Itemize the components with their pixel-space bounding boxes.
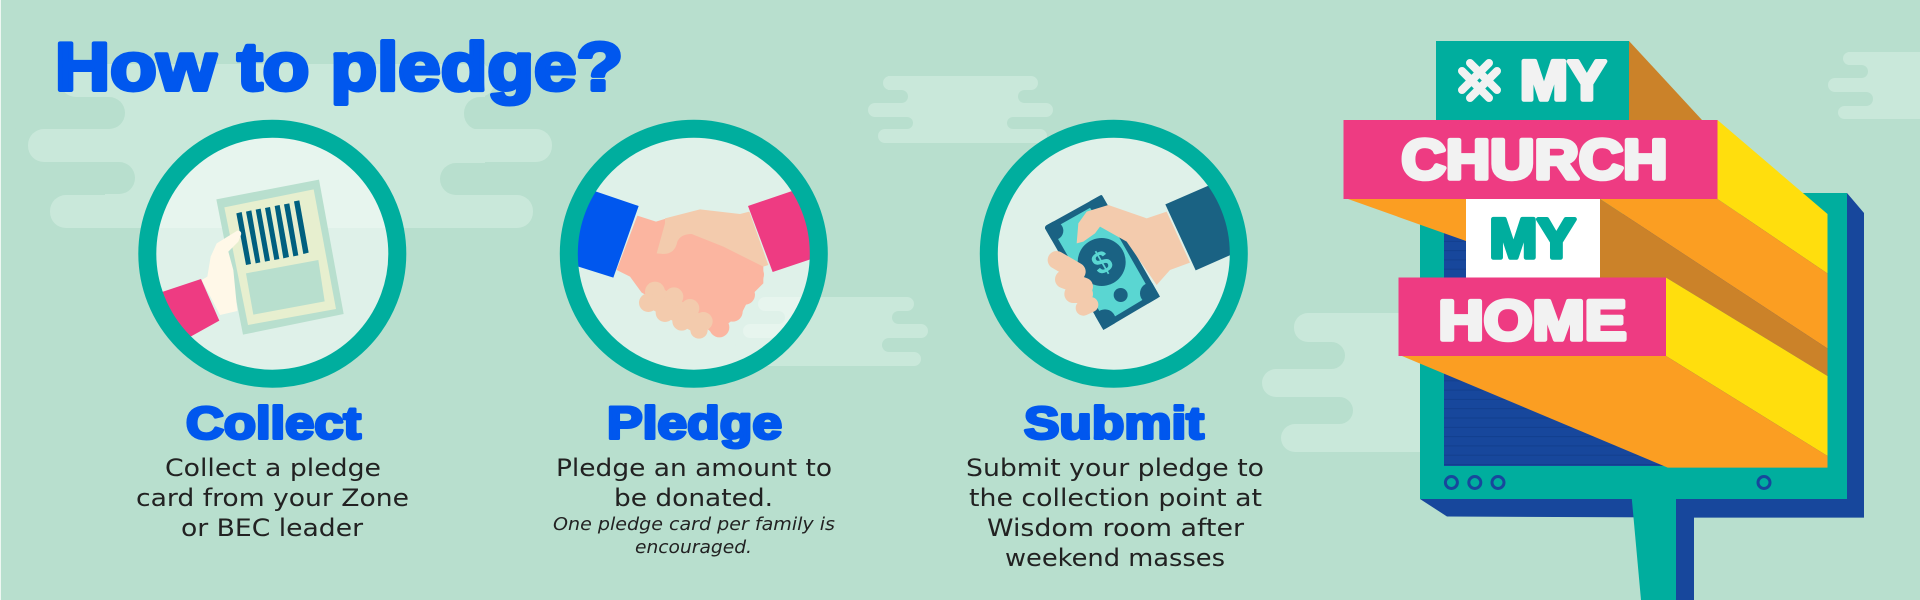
- indicator lights: [1445, 476, 1770, 488]
- text: pledge description: encouraged.: [635, 538, 752, 558]
- sign block: white MY: MY: [1490, 207, 1576, 270]
- text: pledge description: One pledge card per family is: [553, 515, 835, 535]
- icon: hand holding pledge card: [150, 180, 344, 344]
- background clouds: [0, 52, 1920, 452]
- text: submit description: Wisdom room after: [987, 514, 1244, 542]
- heading: Collect: Collect: [186, 398, 361, 448]
- sign block: teal MY: [1436, 41, 1629, 120]
- sign block: CHURCH: CHURCH: [1402, 128, 1668, 191]
- sign block: HOME: HOME: [1438, 289, 1626, 352]
- panel: pledge: [553, 129, 835, 558]
- logo: cross hatch mark: [1462, 63, 1497, 98]
- sign block: teal MY: MY: [1520, 49, 1606, 112]
- icon: handshake: [565, 187, 823, 339]
- sign block: HOME: [1398, 278, 1666, 356]
- 3D sign block sides: [1348, 41, 1828, 468]
- billboard screen: [1444, 214, 1828, 466]
- heading: Pledge: Pledge: [607, 398, 782, 448]
- circle background submit: [989, 129, 1239, 379]
- text: pledge description: Pledge an amount to: [556, 454, 832, 482]
- circle background collect: [147, 129, 397, 379]
- text: collect description: card from your Zone: [136, 484, 409, 512]
- text: submit description: [966, 454, 1264, 572]
- text: collect description: Collect a pledge: [165, 454, 381, 482]
- text: submit description: the collection point at: [969, 484, 1262, 512]
- billboard frame and pole: [1420, 193, 1847, 600]
- text: collect description: [136, 454, 409, 542]
- sign block: white MY: [1466, 199, 1600, 278]
- text: pledge description: be donated.: [614, 484, 773, 512]
- text: submit description: weekend masses: [1005, 544, 1225, 572]
- text: pledge description: [553, 454, 835, 558]
- billboard blue shadow and post: [1420, 193, 1864, 600]
- circle frame submit: [989, 129, 1239, 379]
- panel: submit: [966, 129, 1264, 572]
- circle frame collect: [147, 129, 397, 379]
- text: submit description: Submit your pledge to: [966, 454, 1264, 482]
- icon: hand holding banknote: [1045, 186, 1230, 330]
- dollar sign: $: [1085, 242, 1119, 282]
- sign block: CHURCH: [1344, 120, 1718, 199]
- title: How to pledge?: [55, 29, 623, 105]
- text: collect description: or BEC leader: [181, 514, 363, 542]
- panel: collect: [136, 129, 409, 542]
- heading: Submit: Submit: [1024, 398, 1204, 448]
- circle frame pledge: [569, 129, 819, 379]
- circle background pledge: [569, 129, 819, 379]
- billboard: My Church My Home: [1344, 41, 1864, 600]
